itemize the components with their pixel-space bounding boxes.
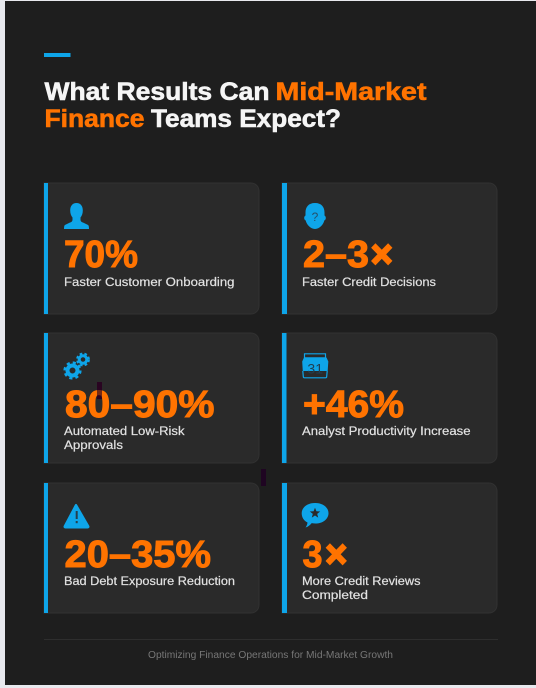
icon: warning triangle <box>64 504 89 528</box>
panel: more credit reviews <box>282 483 497 613</box>
label: Analyst Productivity Increase <box>302 424 471 438</box>
accent bar <box>44 53 70 57</box>
title: Finance <box>44 105 145 133</box>
artifact mark behind stat <box>97 382 102 399</box>
label: Faster Credit Decisions <box>302 275 436 289</box>
label: Faster Customer Onboarding <box>64 275 235 289</box>
stat: 2–3×: 2–3 <box>303 234 369 276</box>
label: Approvals <box>64 438 123 452</box>
label: Bad Debt Exposure Reduction <box>64 574 235 588</box>
icon: speech bubble with star <box>302 503 328 528</box>
icon: person <box>64 203 89 229</box>
panel: analyst productivity <box>282 333 497 463</box>
label <box>302 574 420 602</box>
label: Completed <box>302 588 368 602</box>
label: More Credit Reviews <box>302 574 420 588</box>
icon: head with question mark: ? <box>312 210 319 224</box>
stat: 3×: 3 <box>302 534 322 576</box>
stat: 3×: × <box>326 534 347 576</box>
label: Automated Low-Risk <box>64 424 185 438</box>
title: Teams Expect? <box>151 105 341 133</box>
label <box>64 424 185 452</box>
stat: 70%: 70% <box>64 234 138 276</box>
stat: 2–3×: × <box>371 234 392 276</box>
title: Mid-Market <box>276 78 427 106</box>
artifact mark between panels <box>261 469 266 486</box>
panel: faster credit decisions <box>282 183 497 314</box>
panel: bad debt <box>44 483 259 613</box>
stat: 20–35%: 20–35% <box>64 534 211 576</box>
icon: calendar: 31 <box>307 360 323 376</box>
stat: 80–90%: 80–90% <box>65 384 214 426</box>
stat: 3× <box>302 534 347 576</box>
artifact overlay <box>97 382 102 399</box>
icon: head with question mark <box>304 203 326 229</box>
title <box>44 78 427 133</box>
icon: gears <box>65 354 89 378</box>
panel: automated approvals <box>44 333 259 463</box>
footer text: Optimizing Finance Operations for Mid-Market Growth <box>148 650 393 661</box>
stat: +46%: +46% <box>303 384 404 426</box>
title: What Results Can <box>44 78 270 106</box>
icon: calendar <box>302 354 328 378</box>
panel: faster customer onboarding <box>44 183 259 314</box>
